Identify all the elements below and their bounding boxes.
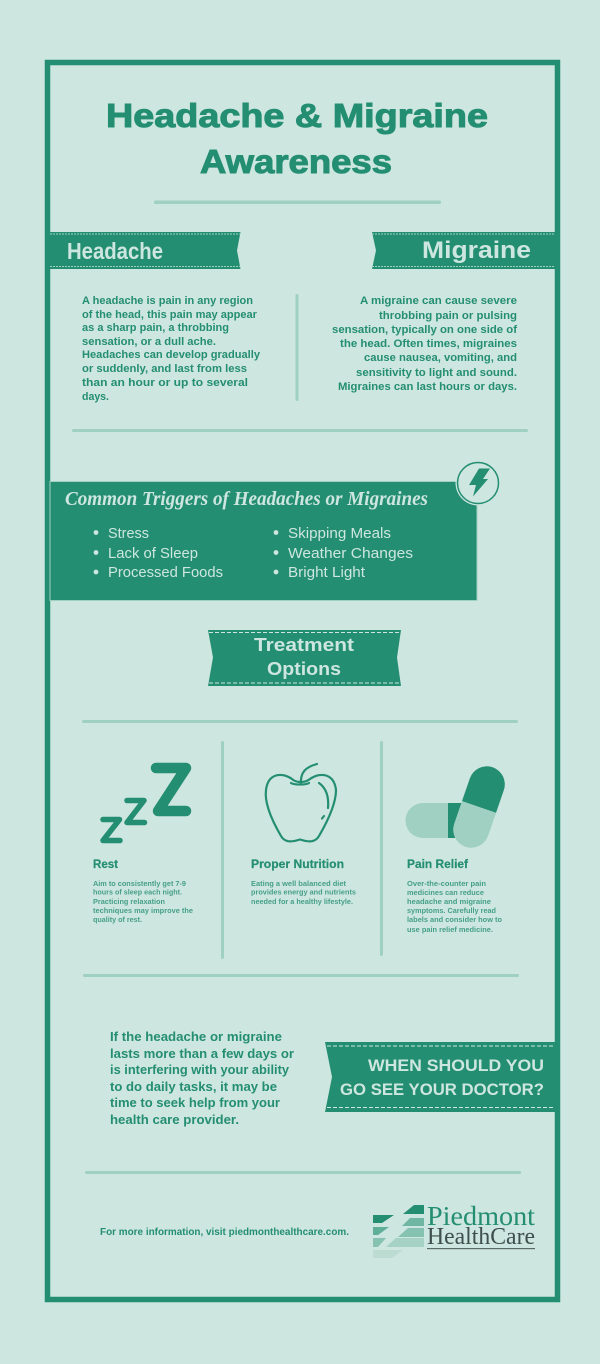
text block: when to see a doctor — [110, 1030, 294, 1127]
column: pain relief — [406, 761, 510, 934]
title: Awareness — [200, 143, 392, 180]
text block: when to see a doctor: is interfering with your ability — [110, 1063, 289, 1077]
text block: migraine definition: A migraine can cause severe — [360, 295, 517, 307]
ribbon: Headache: Headache — [67, 238, 163, 264]
text block: when to see a doctor: If the headache or migraine — [110, 1030, 282, 1044]
text block: when to see a doctor: to do daily tasks, it may be — [110, 1080, 277, 1094]
text block: migraine definition: Migraines can last hours or days. — [338, 381, 517, 393]
text: pain relief description — [407, 879, 502, 934]
text block: headache definition: of the head, this pain may appear — [82, 309, 258, 321]
text: nutrition description — [251, 879, 356, 906]
ribbon: treatment options: Options — [267, 658, 341, 679]
text: pain relief description: medicines can reduce — [407, 888, 484, 897]
list: triggers column 2: Bright Light — [288, 565, 365, 581]
text block: headache definition: days. — [82, 391, 109, 403]
text block: headache definition — [82, 295, 261, 403]
text block: when to see a doctor: time to seek help from your — [110, 1096, 280, 1110]
list: triggers column 1: Processed Foods — [108, 565, 223, 581]
text: rest description: techniques may improve the — [93, 906, 193, 915]
icon: apple — [266, 764, 336, 841]
text block: migraine definition: throbbing pain or pulsing — [379, 310, 517, 322]
text block: headache definition: or suddenly, and last from less — [82, 363, 247, 375]
ribbon: when should you go see your doctor — [325, 1042, 555, 1112]
text: pain relief description: labels and consider how to — [407, 915, 502, 924]
ribbon: Headache — [50, 232, 240, 269]
list: triggers column 2 — [274, 526, 413, 581]
text block: headache definition: than an hour or up to several — [82, 377, 248, 389]
logo: Piedmont HealthCare — [373, 1201, 536, 1258]
column: proper nutrition — [251, 764, 356, 906]
text block: migraine definition: sensation, typically on one side of — [332, 324, 517, 336]
text: rest description: Aim to consistently get 7-9 — [93, 879, 186, 888]
text block: headache definition: as a sharp pain, a throbbing — [82, 322, 229, 334]
list: triggers column 1: Stress — [108, 526, 149, 542]
panel: common triggers — [50, 482, 477, 600]
heading: triggers: Common Triggers of Headaches or Migraines — [65, 489, 428, 510]
list: triggers column 1 — [94, 526, 223, 581]
heading: pain relief: Pain Relief — [407, 859, 468, 871]
text block: when to see a doctor: health care provider. — [110, 1113, 239, 1127]
text block: migraine definition: cause nausea, vomiting, and — [364, 352, 517, 364]
text: pain relief description: symptoms. Carefully read — [407, 906, 496, 915]
list: triggers column 1: Lack of Sleep — [108, 546, 198, 562]
text: nutrition description: Eating a well balanced diet — [251, 879, 346, 888]
title — [106, 97, 488, 180]
logo mark — [373, 1205, 424, 1258]
text: nutrition description: needed for a healthy lifestyle. — [251, 897, 353, 906]
text: pain relief description: Over-the-counter pain — [407, 879, 486, 888]
text: pain relief description: use pain relief medicine. — [407, 925, 493, 934]
icon: sleeping z's — [103, 768, 186, 840]
ribbon: Migraine: Migraine — [422, 237, 531, 264]
icon: lightning bolt — [456, 460, 500, 506]
text block: migraine definition — [332, 295, 517, 393]
text: pain relief description: headache and migraine — [407, 897, 491, 906]
icon: pills — [406, 761, 510, 853]
text: rest description: Practicing relaxation — [93, 897, 165, 906]
ribbon: treatment options: Treatment — [254, 634, 354, 655]
list: triggers column 2: Weather Changes — [288, 546, 413, 562]
heading: proper nutrition: Proper Nutrition — [251, 859, 344, 871]
logo wordmark: Piedmont — [427, 1201, 536, 1231]
ribbon: when should you go see your doctor: GO SEE YOUR DOCTOR? — [340, 1080, 544, 1099]
text block: when to see a doctor: lasts more than a few days or — [110, 1047, 294, 1061]
ribbon: Migraine — [372, 232, 555, 269]
column: rest — [93, 768, 193, 924]
ribbon: treatment options — [208, 630, 401, 686]
heading: rest: Rest — [93, 859, 118, 871]
text block: headache definition: A headache is pain in any region — [82, 295, 253, 307]
text: nutrition description: provides energy and nutrients — [251, 888, 356, 896]
text block: migraine definition: the head. Often times, migraines — [340, 338, 517, 350]
logo: Piedmont HealthCare: HealthCare — [427, 1224, 535, 1250]
footer note: For more information, visit piedmonthealthcare.com. — [100, 1226, 349, 1238]
title: Headache & Migraine — [106, 97, 488, 134]
text: rest description: hours of sleep each night. — [93, 888, 182, 896]
text block: headache definition: Headaches can develop gradually — [82, 349, 261, 361]
list: triggers column 2: Skipping Meals — [288, 526, 391, 542]
text: rest description — [93, 879, 193, 924]
text block: headache definition: sensation, or a dull ache. — [82, 336, 216, 348]
ribbon: when should you go see your doctor: WHEN SHOULD YOU — [368, 1056, 544, 1075]
text: rest description: quality of rest. — [93, 915, 142, 924]
text block: migraine definition: sensitivity to light and sound. — [356, 367, 517, 379]
